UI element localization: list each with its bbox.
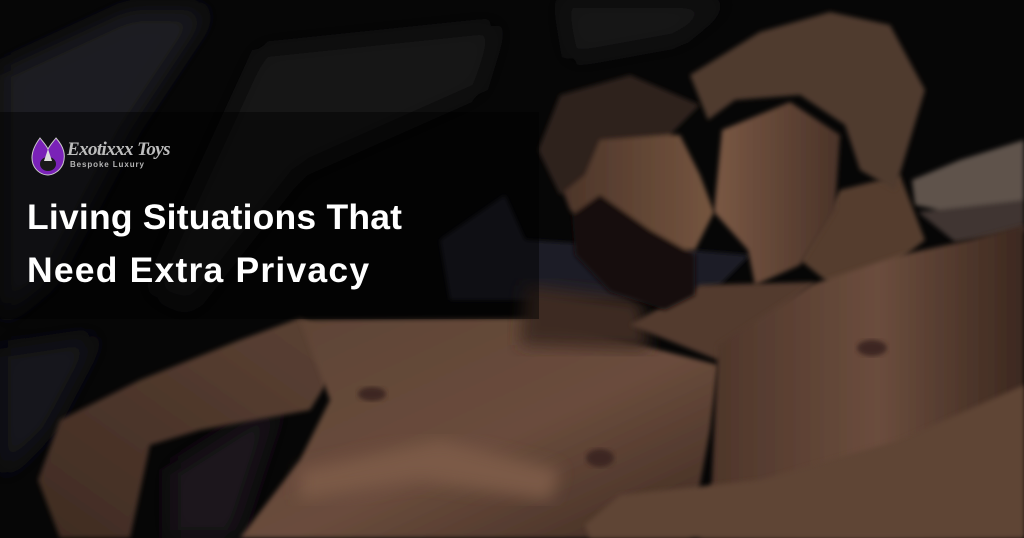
right figure arm behind [630,282,815,360]
right figure neck [800,175,925,300]
heading: Need Extra Privacy [27,250,370,290]
left figure arm [38,318,350,538]
logo: Exotixxx Toys [32,137,170,176]
abdominal shading [300,440,560,500]
icon: purple drop [32,137,65,176]
logo wordmark: Exotixxx Toys [67,139,170,160]
heading: Living Situations That [27,197,402,237]
left figure torso [240,318,718,538]
neck [520,285,650,350]
pillows and blanket [440,140,1024,300]
right figure chest [700,225,1024,538]
logo tagline: Bespoke Luxury [70,160,145,169]
velvet fabric [0,0,730,538]
nipple marks [358,387,386,401]
right figure head [690,12,925,285]
right figure forearm [585,385,1024,538]
right figure [585,175,1024,538]
heading [27,197,402,290]
translucent title panel [0,112,539,319]
left figure [38,285,718,538]
left figure head [538,75,714,310]
